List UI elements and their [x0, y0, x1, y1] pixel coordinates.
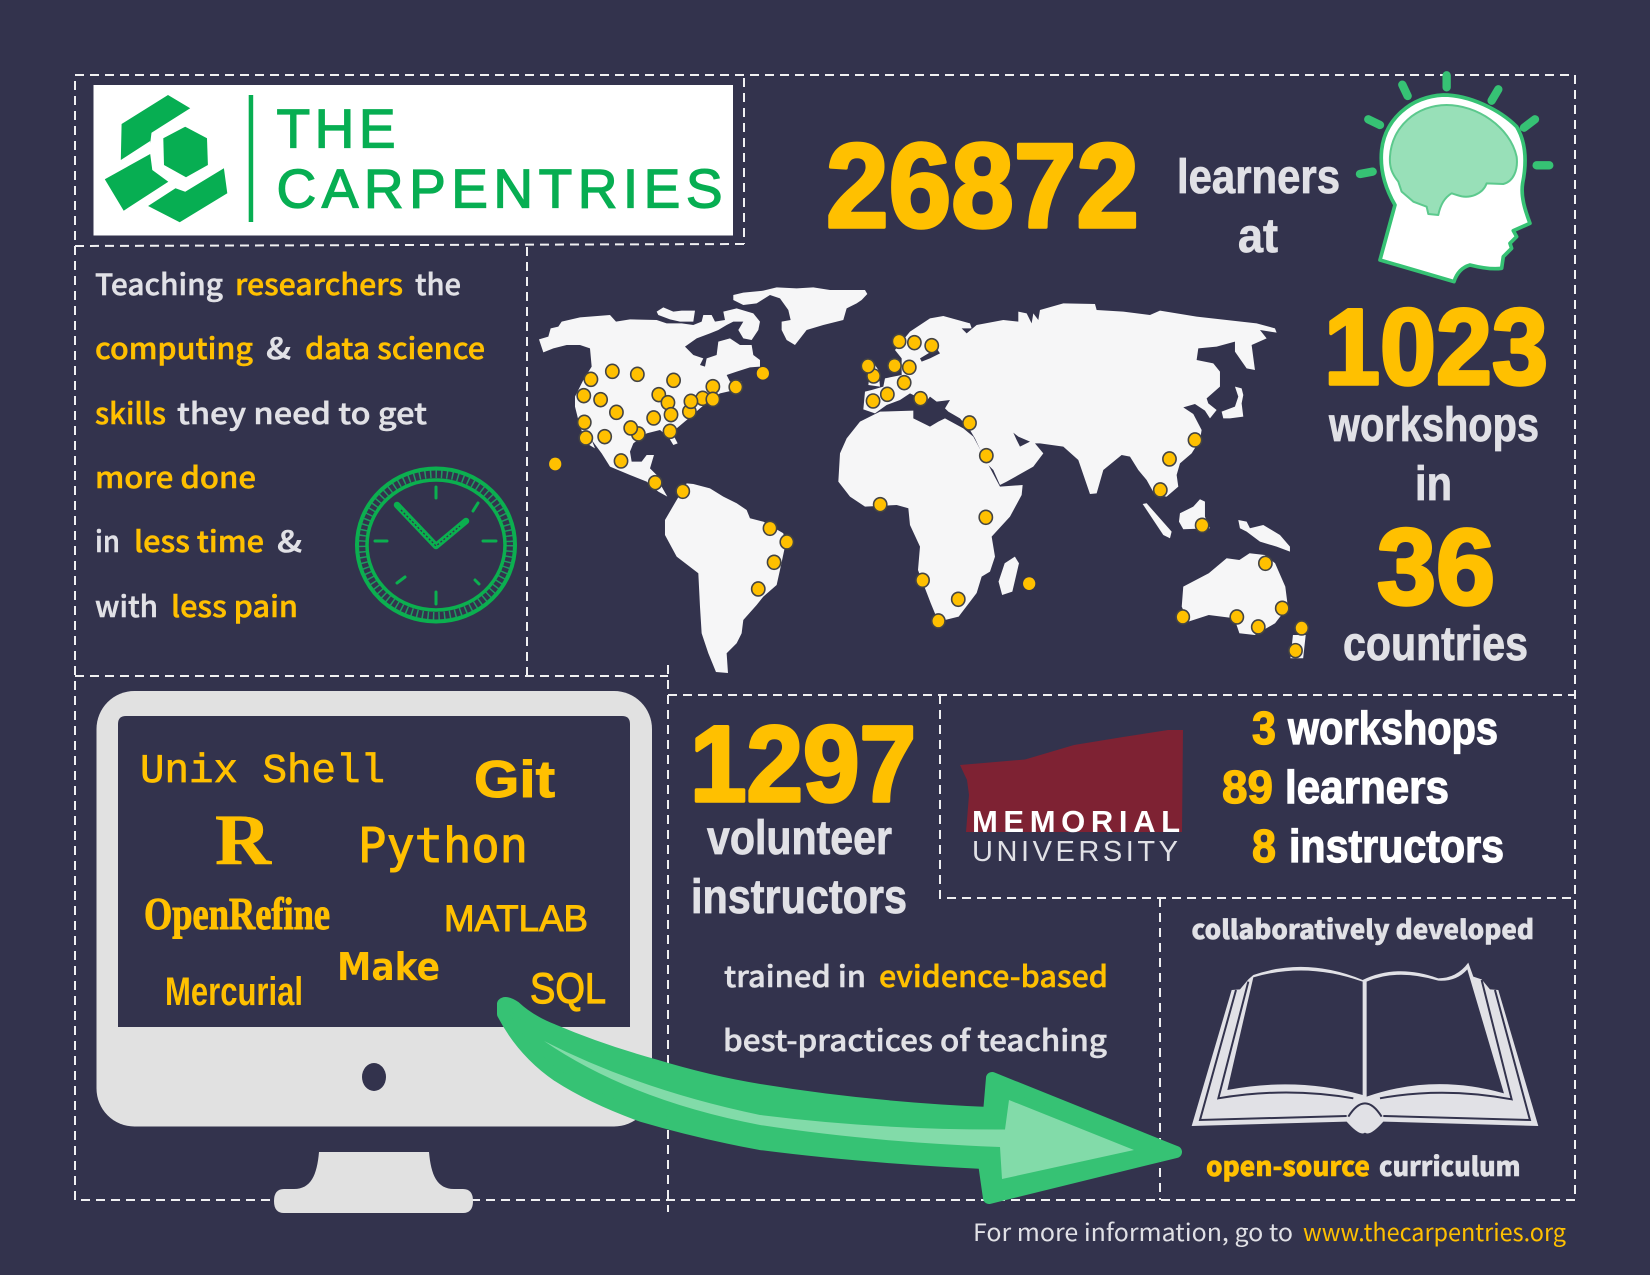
stat: learners [826, 119, 1340, 263]
text: trained in evidence-based teaching [723, 954, 1108, 1060]
panel: mission statement: they need to get [177, 391, 428, 433]
panel: mission statement: less time [134, 519, 264, 561]
panel: mission statement: with [95, 584, 158, 626]
panel: mission statement: less pain [171, 584, 298, 626]
text: trained in evidence-based teaching: trained in [724, 954, 866, 996]
map: Europe, Asia and Africa [838, 303, 1290, 622]
caption: open-source curriculum: curriculum [1379, 1147, 1520, 1184]
caption: open-source curriculum [1206, 1147, 1520, 1184]
panel: Memorial University case study [960, 702, 1504, 872]
panel: mission statement: data science [305, 326, 485, 368]
logo: Memorial University: UNIVERSITY [972, 836, 1178, 868]
panel: mission statement: skills [95, 391, 166, 433]
countries count: 36 [1377, 506, 1495, 627]
monitor screen [118, 716, 630, 1027]
logo: The Carpentries [94, 85, 733, 236]
icon: open book [1192, 963, 1538, 1133]
screen: lesson topics: Make [337, 945, 440, 989]
logo wordmark: CARPENTRIES [276, 158, 722, 220]
Memorial stats: 89 [1222, 761, 1273, 813]
screen: lesson topics: Mercurial [165, 970, 303, 1014]
text: trained in evidence-based teaching: best-practices of teaching [723, 1018, 1107, 1060]
Memorial stats: 8 [1252, 820, 1276, 872]
logo: Memorial University: MEMORIAL [972, 804, 1180, 839]
monitor stand [274, 1152, 473, 1213]
countries label: countries [1343, 618, 1528, 671]
Memorial stats: instructors [1289, 820, 1504, 872]
workshops count: 1023 [1324, 286, 1548, 407]
panel: mission statement: the [415, 262, 461, 304]
chart: world map of workshops [539, 287, 1308, 673]
stat: volunteer instructors [690, 703, 916, 924]
map: inland seas [920, 348, 1030, 447]
arrow: from lessons to curriculum [503, 1003, 1176, 1198]
logo wordmark [276, 98, 722, 220]
panel: mission statement [95, 262, 485, 626]
screen: lesson topics: MATLAB [444, 898, 588, 939]
map: Americas [539, 287, 867, 673]
panel: mission statement: computing [95, 326, 253, 368]
learners label: at [1238, 210, 1278, 263]
workshops label: workshops [1328, 399, 1539, 452]
Memorial stats: 3 [1252, 702, 1276, 754]
workshops label [1328, 399, 1539, 511]
screen: lesson topics: OpenRefine [144, 888, 330, 939]
panel: mission statement: & [277, 519, 302, 561]
Memorial stats: workshops [1287, 702, 1498, 754]
instructors label: instructors [691, 871, 907, 924]
text: trained in evidence-based teaching: evidence-based [879, 954, 1108, 996]
screen: lesson topics: Unix Shell [140, 749, 385, 795]
icon: head with brain [1360, 75, 1549, 282]
monitor camera [362, 1063, 386, 1091]
screen: lesson topics: Git [474, 751, 555, 809]
instructors count: 1297 [690, 703, 916, 824]
logo: Memorial University [960, 730, 1183, 868]
caption: open-source curriculum: open-source [1206, 1147, 1370, 1184]
Memorial stats [1222, 702, 1504, 872]
panel: mission statement: & [266, 326, 291, 368]
logo wordmark: THE [276, 98, 396, 160]
heading: collaboratively developed: collaboratively developed [1192, 910, 1534, 947]
icon: clock [357, 468, 515, 622]
map: Australasia and Madagascar [999, 553, 1306, 658]
footer: more information link [973, 1213, 1566, 1248]
panel: mission statement: Teaching [95, 262, 223, 304]
learners label: learners [1177, 151, 1340, 204]
instructors label: volunteer [707, 812, 892, 865]
screen: lesson topics [140, 749, 606, 1014]
screen: lesson topics: Python [358, 818, 528, 874]
workshops label: in [1415, 458, 1452, 511]
icon: carpentries hexagon mark [105, 95, 253, 222]
icon: computer monitor [96, 691, 652, 1213]
learners count: 26872 [826, 119, 1139, 253]
panel: curriculum [1192, 910, 1538, 1184]
footer: more information link: www.thecarpentries.org [1303, 1213, 1566, 1248]
footer: more information link: For more information, go to [973, 1213, 1293, 1248]
instructors label [691, 812, 907, 924]
Memorial stats: learners [1285, 761, 1449, 813]
stat: workshops and countries [1324, 286, 1548, 671]
map: workshop location dots [549, 334, 1308, 658]
learners label [1177, 151, 1340, 263]
monitor body [96, 691, 652, 1126]
screen: lesson topics: SQL [530, 965, 606, 1013]
panel: mission statement: more done [95, 455, 256, 497]
screen: lesson topics: R [215, 800, 272, 880]
panel: mission statement: researchers [235, 262, 403, 304]
panel: mission statement: in [95, 519, 120, 561]
